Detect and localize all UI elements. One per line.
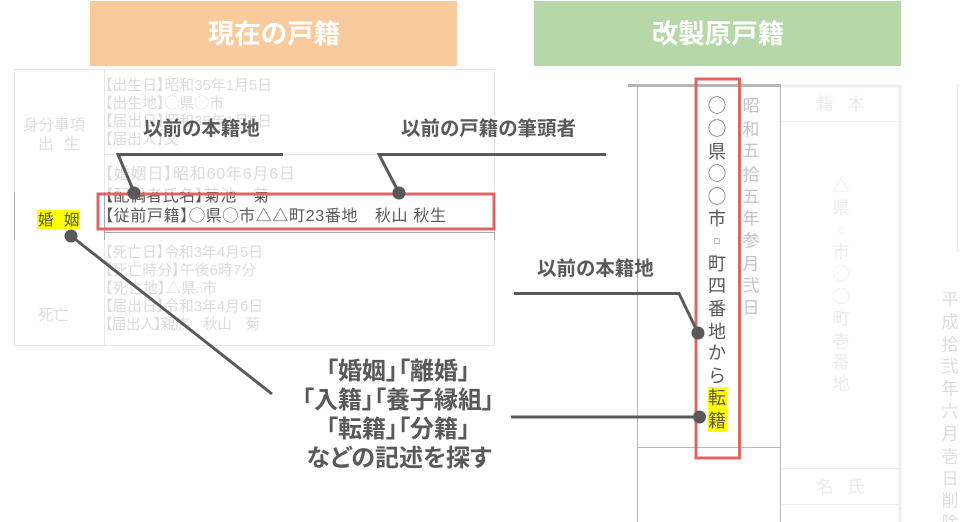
birth entries: 【出生日】昭和35年1月5日: [105, 77, 272, 94]
heading cell: register: 本: [848, 94, 864, 114]
death entries: [105, 244, 263, 333]
highlighted label: marriage: 婚: [38, 211, 54, 229]
row labels: 出: [38, 135, 54, 153]
table grid: [14, 70, 494, 346]
vertical text: date: 年: [742, 210, 760, 228]
birth entries: 【届出日】昭和35年1月5日: [105, 113, 272, 130]
vertical text: registered domicile: □: [838, 225, 844, 235]
vertical text: deletion date: 六: [942, 402, 958, 422]
vertical text: previous registered domicile: ◯: [708, 96, 726, 116]
highlight: transfer of register: [708, 387, 727, 432]
death entries: 【死亡地】△県□市: [105, 280, 217, 297]
note: entries to look for: などの記述を探す: [306, 445, 492, 472]
death entries: 【死亡時分】午後6時7分: [105, 262, 256, 279]
vertical text: deletion date: 月: [942, 424, 958, 444]
vertical text: previous registered domicile: □: [714, 236, 720, 246]
note: entries to look for: [302, 358, 494, 472]
highlight box: vertical domicile column: [696, 79, 740, 458]
vertical text: date: 弐: [742, 276, 760, 296]
vertical text: registered domicile: 市: [832, 242, 850, 262]
callout: previous domicile, original register: 以前の本籍地: [537, 258, 654, 280]
callout: previous domicile, current register: [118, 118, 283, 200]
row labels: 死亡: [38, 306, 69, 324]
vertical text: registered domicile: 壱: [832, 332, 850, 352]
vertical text: date: 拾: [742, 166, 760, 184]
vertical text: registered domicile: [832, 176, 850, 394]
vertical text: previous registered domicile: か: [708, 343, 726, 363]
vertical text: date: 日: [742, 298, 760, 318]
birth entries: 【届出人】父: [105, 131, 179, 148]
vertical text: registered domicile: 県: [832, 198, 850, 218]
marriage entries: 【配偶者氏名】菊池 菊: [105, 187, 269, 205]
heading cell: register: [816, 94, 864, 114]
panel: current register table: [14, 70, 494, 346]
row labels: 身分事項: [23, 116, 86, 134]
note: entries to look for: 「婚姻」「離婚」: [326, 358, 470, 385]
vertical text: previous registered domicile: 町: [708, 254, 726, 274]
marriage entries: 【従前戸籍】◯県◯市△△町23番地 秋山 秋生: [105, 207, 446, 225]
marriage entries: [105, 165, 446, 225]
panel: original register: [628, 85, 960, 522]
vertical text: previous registered domicile: ◯: [708, 187, 726, 207]
marriage entries: 【配偶者氏名】菊池 菊: [105, 187, 269, 205]
vertical text: previous registered domicile: 県: [708, 142, 726, 162]
vertical text: date: 月: [742, 254, 760, 274]
callout: previous head of register: 以前の戸籍の筆頭者: [401, 118, 576, 140]
highlighted label: marriage: [37, 210, 80, 229]
vertical text: deletion date: 削: [942, 492, 958, 510]
vertical text: previous registered domicile: 転: [708, 388, 726, 408]
vertical text: registered domicile: ◯: [832, 288, 850, 306]
callout: previous domicile, original register: [514, 258, 704, 340]
row labels: [23, 116, 86, 324]
vertical text: registered domicile: 番: [832, 352, 850, 372]
birth entries: [105, 77, 272, 148]
vertical text: deletion date: [942, 290, 958, 522]
header: current family register: 現在の戸籍: [208, 19, 340, 49]
vertical text: previous registered domicile: 番: [708, 299, 726, 319]
highlighted label: marriage: 姻: [64, 211, 80, 229]
vertical text: previous registered domicile: 四: [708, 276, 726, 296]
vertical text: deletion date: 拾: [942, 336, 958, 354]
vertical text: registered domicile: ◯: [832, 264, 850, 284]
vertical text: registered domicile: 町: [832, 310, 850, 328]
vertical text: date: 参: [742, 232, 760, 250]
death entries: 【届出日】令和3年4月6日: [105, 298, 263, 315]
vertical text: previous registered domicile: 籍: [708, 411, 726, 431]
vertical text: deletion date: 弐: [942, 358, 958, 376]
marriage entries: 【婚姻日】昭和60年6月6日: [105, 165, 295, 183]
vertical text: previous registered domicile: 地: [708, 322, 726, 342]
vertical text: date: 昭: [742, 96, 760, 116]
header: original register before revision: 改製原戸籍: [652, 19, 784, 49]
highlight box: previous register row: [98, 194, 494, 229]
register grid: [628, 85, 960, 522]
death entries: 【届出人】親族 秋山 菊: [105, 316, 260, 333]
heading cell: name: 氏: [848, 478, 864, 496]
vertical text: date: 五: [742, 142, 760, 160]
death entries: 【死亡日】令和3年4月5日: [105, 244, 263, 261]
vertical text: deletion date: 成: [942, 312, 958, 332]
arrow: marriage label to note: [64, 230, 272, 394]
vertical text: previous registered domicile: 市: [708, 209, 726, 229]
vertical text: date: 五: [742, 188, 760, 206]
vertical text: deletion date: 壱: [942, 448, 958, 466]
note: entries to look for: 「入籍」「養子縁組」: [302, 387, 494, 414]
vertical text: previous registered domicile: [708, 96, 726, 431]
note: entries to look for: 「転籍」「分籍」: [326, 416, 470, 443]
vertical text: date: 和: [742, 120, 760, 140]
row labels: 生: [64, 135, 80, 153]
arrow: note to transfer entry: [511, 410, 706, 424]
vertical text: previous registered domicile: ら: [708, 366, 726, 386]
callout: previous domicile, current register: 以前の本籍地: [143, 118, 260, 140]
birth entries: 【出生地】◯県◯市: [105, 95, 224, 112]
vertical text: previous registered domicile: ◯: [708, 164, 726, 184]
heading cell: name: 名: [816, 478, 834, 496]
header: original register before revision: [534, 1, 901, 66]
heading cell: register: 籍: [816, 94, 834, 114]
vertical text: previous registered domicile: ◯: [708, 119, 726, 139]
header: current family register: [90, 1, 457, 66]
vertical text: deletion date: 年: [942, 380, 958, 398]
vertical text: registered domicile: 地: [832, 374, 850, 394]
vertical text: registered domicile: △: [832, 176, 850, 196]
vertical text: date: [742, 96, 760, 318]
vertical text: deletion date: 平: [942, 290, 958, 310]
heading cell: name: [816, 478, 864, 496]
callout: previous head of register: [379, 118, 606, 200]
vertical text: deletion date: 日: [942, 470, 958, 488]
